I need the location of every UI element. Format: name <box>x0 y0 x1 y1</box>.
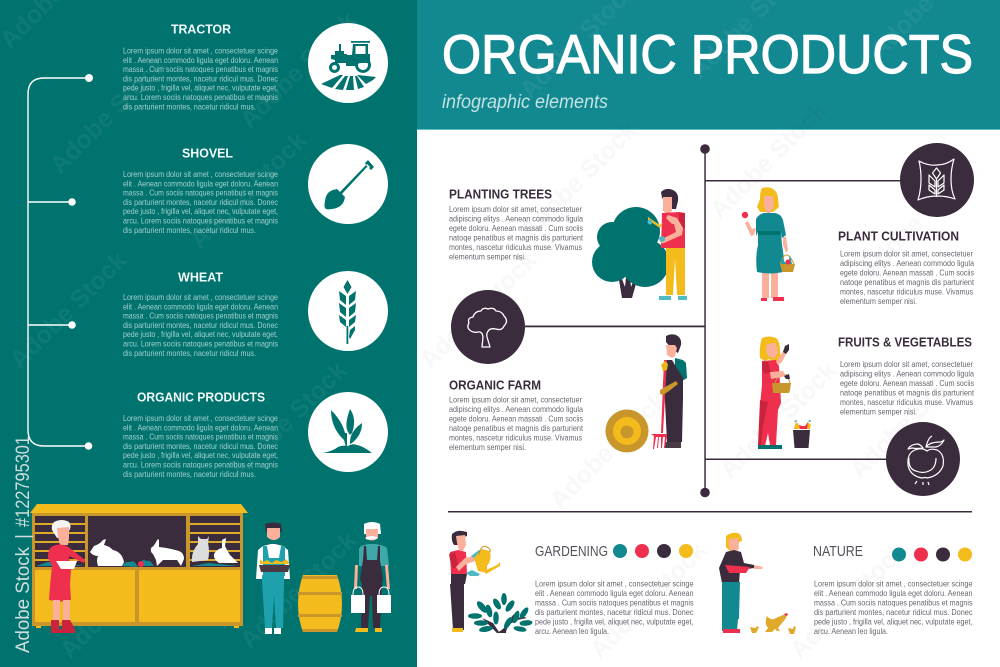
heading: plant cultivation: PLANT CULTIVATION <box>838 228 959 244</box>
icon: tree circle <box>451 290 525 364</box>
illustration: woman picking fruit <box>758 336 791 449</box>
illustration: fruit bucket <box>793 420 811 448</box>
icon: tractor <box>308 23 388 103</box>
heading: shovel: SHOVEL <box>182 146 233 160</box>
watermark layer: Adobe Stock <box>854 156 982 284</box>
text block: shovel <box>123 169 279 235</box>
text block: wheat: pede justo , frigilla vel, aliquet nec, vulputate eget, <box>123 329 278 339</box>
text block: planting trees <box>449 204 584 262</box>
text block: planting trees: elementum semper nisi. <box>449 252 526 262</box>
text block: tractor: dis parturient montes, nacetur ridicul mus. <box>123 101 256 111</box>
text block: gardening: elit . Aenean commodo ligula eget doloru. Aenean <box>535 588 694 598</box>
text block: planting trees: natoqe penatibus et magnis dis parturient <box>449 232 583 242</box>
text block: shovel: arcu. Lorem sociis natoques penatibus et magnis <box>123 216 278 226</box>
watermark layer: Adobe Stock <box>234 6 362 134</box>
text block: wheat <box>123 292 279 358</box>
text block: organic products: dis parturient montes, nacetur ridicul mus. Donec <box>123 441 279 451</box>
text block: organic farm: Lorem ipsum dolor sit amet, consectetuer <box>449 394 582 404</box>
text block: shovel: massa . Cum sociis natoques penatibus et magnis <box>123 188 278 198</box>
text block: nature: dis parturient montes, nacetur ridicul mus. Donec <box>814 607 973 617</box>
text block: shovel: pede justo , frigilla vel, aliquet nec, vulputate eget, <box>123 206 278 216</box>
stock id vertical label <box>13 436 34 653</box>
heading: wheat: WHEAT <box>178 270 223 284</box>
text block: organic farm: egete doloru. Aenean massati . Cum sociis <box>449 414 584 424</box>
text block: shovel: dis parturient montes, nacetur ridicul mus. <box>123 225 256 235</box>
watermark layer: Adobe Stock <box>54 536 182 664</box>
stock id vertical label: | <box>13 534 34 539</box>
heading: fruits and vegetables: FRUITS & VEGETABLES <box>838 334 972 350</box>
text block: fruits and vegetables: adipiscing elitys . Aenean commodo ligula <box>840 368 974 378</box>
text block: wheat: Lorem ipsum dolor sit amet , consectetuer scinge <box>123 292 278 302</box>
text block: planting trees: adipiscing elitys . Aenean commodo ligula <box>449 214 583 224</box>
text block: planting trees: egete doloru. Aenean massati . Cum sociis <box>449 223 584 233</box>
text block: planting trees heading: PLANTING TREES <box>449 186 552 202</box>
text block: fruits and vegetables: montes, nascetur ridiculus muse. Vivamus <box>840 397 974 407</box>
watermark layer: Adobe Stock <box>844 356 972 484</box>
icon: shovel <box>308 144 388 224</box>
text block: organic farm: adipiscing elitys . Aenean commodo ligula <box>449 404 583 414</box>
colour dots: nature <box>892 548 972 562</box>
man with tray <box>256 522 290 634</box>
woman <box>48 520 85 633</box>
text block: wheat: dis parturient montes, nacetur ridicul mus. <box>123 348 256 358</box>
heading: gardening: GARDENING <box>535 544 608 560</box>
text block: organic products: Lorem ipsum dolor sit amet , consectetuer scinge <box>123 413 278 423</box>
text block: tractor: arcu. Lorem sociis natoques penatibus et magnis <box>123 92 278 102</box>
farmer with buckets <box>351 522 391 632</box>
text block: shovel: elit . Aenean commodo ligula eget doloru. Aenean <box>123 178 278 188</box>
text block: wheat: arcu. Lorem sociis natoques penatibus et magnis <box>123 338 278 348</box>
watermark layer: Adobe Stock <box>704 96 832 224</box>
heading: tractor: TRACTOR <box>171 22 232 36</box>
text block: planting trees: montes, nascetur ridiculus muse. Vivamus <box>449 242 583 252</box>
watermark layer: Adobe Stock <box>224 356 352 484</box>
text block: plant cultivation: elementum semper nisi. <box>840 296 917 306</box>
text block: tractor: Lorem ipsum dolor sit amet , consectetuer scinge <box>123 46 278 56</box>
divider <box>448 511 972 512</box>
text block: wheat: elit . Aenean commodo ligula eget doloru. Aenean <box>123 301 278 311</box>
text block: organic farm: elementum semper nisi. <box>449 442 526 452</box>
text block: organic farm: montes, nascetur ridiculus muse. Vivamus <box>449 432 583 442</box>
text block: tractor: elit . Aenean commodo ligula eget doloru. Aenean <box>123 55 278 65</box>
watermark layer: Adobe Stock <box>544 386 672 514</box>
text block: plant cultivation: adipiscing elitys . Aenean commodo ligula <box>840 258 974 268</box>
illustration: plant <box>468 593 533 633</box>
icon: wheat <box>308 271 388 351</box>
text block: tractor: dis parturient montes, nacetur ridicul mus. Donec <box>123 73 279 83</box>
watermark layer: Adobe Stock <box>784 536 912 664</box>
text block: organic products: massa . Cum sociis natoques penatibus et magnis <box>123 432 278 442</box>
text block: gardening: dis parturient montes, nacetur ridicul mus. Donec <box>535 607 694 617</box>
heading: nature: NATURE <box>813 544 863 560</box>
left teal panel <box>0 0 417 667</box>
header band <box>417 0 1000 129</box>
text block: tractor: massa . Cum sociis natoques penatibus et magnis <box>123 64 278 74</box>
text block: shovel: dis parturient montes, nacetur ridicul mus. Donec <box>123 197 279 207</box>
subtitle: infographic elements <box>442 91 608 113</box>
watermark layer: Adobe Stock <box>714 356 842 484</box>
text block: organic products: arcu. Lorem sociis natoques penatibus et magnis <box>123 460 278 470</box>
stock id vertical label: Adobe Stock <box>13 547 34 653</box>
text block: organic products: dis parturient montes, nacetur ridicul mus. <box>123 469 256 479</box>
text block: plant cultivation: montes, nascetur ridiculus muse. Vivamus <box>840 286 974 296</box>
text block: organic products: pede justo , frigilla vel, aliquet nec, vulputate eget, <box>123 450 278 460</box>
colour dots: gardening <box>613 544 693 558</box>
barrel <box>298 575 342 632</box>
icon: apple circle <box>886 422 960 496</box>
heading: organic products: ORGANIC PRODUCTS <box>137 390 265 404</box>
text block: plant cultivation <box>840 248 975 306</box>
text block: shovel: Lorem ipsum dolor sit amet , consectetuer scinge <box>123 169 278 179</box>
text block: nature <box>814 578 973 636</box>
text block: wheat: massa . Cum sociis natoques penatibus et magnis <box>123 311 278 321</box>
watermark layer: Adobe Stock <box>234 526 362 654</box>
text block: tractor <box>123 46 279 111</box>
watermark layer: Adobe Stock <box>414 246 542 374</box>
text block: fruits and vegetables: Lorem ipsum dolor sit amet, consectetuer <box>840 359 973 369</box>
text block: wheat: dis parturient montes, nacetur ridicul mus. Donec <box>123 320 279 330</box>
text block: gardening: Lorem ipsum dolor sit amet , consectetuer scinge <box>535 578 694 588</box>
text block: nature: elit . Aenean commodo ligula eget doloru. Aenean <box>814 588 973 598</box>
text block: planting trees: Lorem ipsum dolor sit amet, consectetuer <box>449 204 582 214</box>
heading: organic farm: ORGANIC FARM <box>449 378 541 392</box>
spine connector <box>525 144 900 497</box>
text block: plant cultivation: Lorem ipsum dolor sit amet, consectetuer <box>840 248 973 258</box>
text block: nature: arcu. Aenean leo ligula. <box>814 626 888 636</box>
text block: organic farm <box>449 394 584 452</box>
text block: organic products: elit . Aenean commodo ligula eget doloru. Aenean <box>123 422 278 432</box>
left connector timeline <box>28 74 93 450</box>
text block: organic products <box>123 413 279 479</box>
text block: gardening: massa . Cum sociis natoques penatibus et magnis <box>535 597 694 607</box>
text block: fruits and vegetables: natoqe penatibus et magnis dis parturient <box>840 388 974 398</box>
illustration: woman with basket <box>742 187 795 301</box>
illustration: chickens <box>750 613 796 634</box>
watermark layer: Adobe Stock <box>44 51 172 179</box>
icon: sprout <box>308 392 388 472</box>
illustration: man feeding chickens <box>719 533 763 633</box>
watermark layer: Adobe Stock <box>4 246 132 374</box>
text block: organic farm: natoqe penatibus et magnis dis parturient <box>449 423 583 433</box>
watermark layer: Adobe Stock <box>514 116 642 244</box>
text block: gardening <box>535 578 694 636</box>
text block: plant cultivation: egete doloru. Aenean massati . Cum sociis <box>840 268 975 278</box>
text block: gardening: pede justo , frigilla vel, aliquet nec, vulputate eget, <box>535 616 694 626</box>
text block: fruits and vegetables: elementum semper nisi. <box>840 406 917 416</box>
stock id vertical label: #122795301 <box>13 436 34 527</box>
text block: fruits and vegetables <box>840 359 975 416</box>
text block: fruits and vegetables: egete doloru. Aenean massati . Cum sociis <box>840 378 975 388</box>
watermark layer: Adobe Stock <box>584 536 712 664</box>
rabbits <box>90 536 238 566</box>
illustration: farmer with pitchfork and hay <box>606 334 687 452</box>
market stall <box>30 504 391 634</box>
icon: sack circle <box>900 143 974 217</box>
illustration: man with watering can <box>449 531 500 632</box>
watermark layer: Adobe Stock <box>184 126 312 254</box>
text block: plant cultivation: natoqe penatibus et magnis dis parturient <box>840 277 974 287</box>
text block: tractor: pede justo , frigilla vel, aliquet nec, vulputate eget, <box>123 83 278 93</box>
text block: nature: Lorem ipsum dolor sit amet , consectetuer scinge <box>814 578 973 588</box>
text block: gardening: arcu. Aenean leo ligula. <box>535 626 609 636</box>
illustration: tree and gardener <box>592 189 687 300</box>
